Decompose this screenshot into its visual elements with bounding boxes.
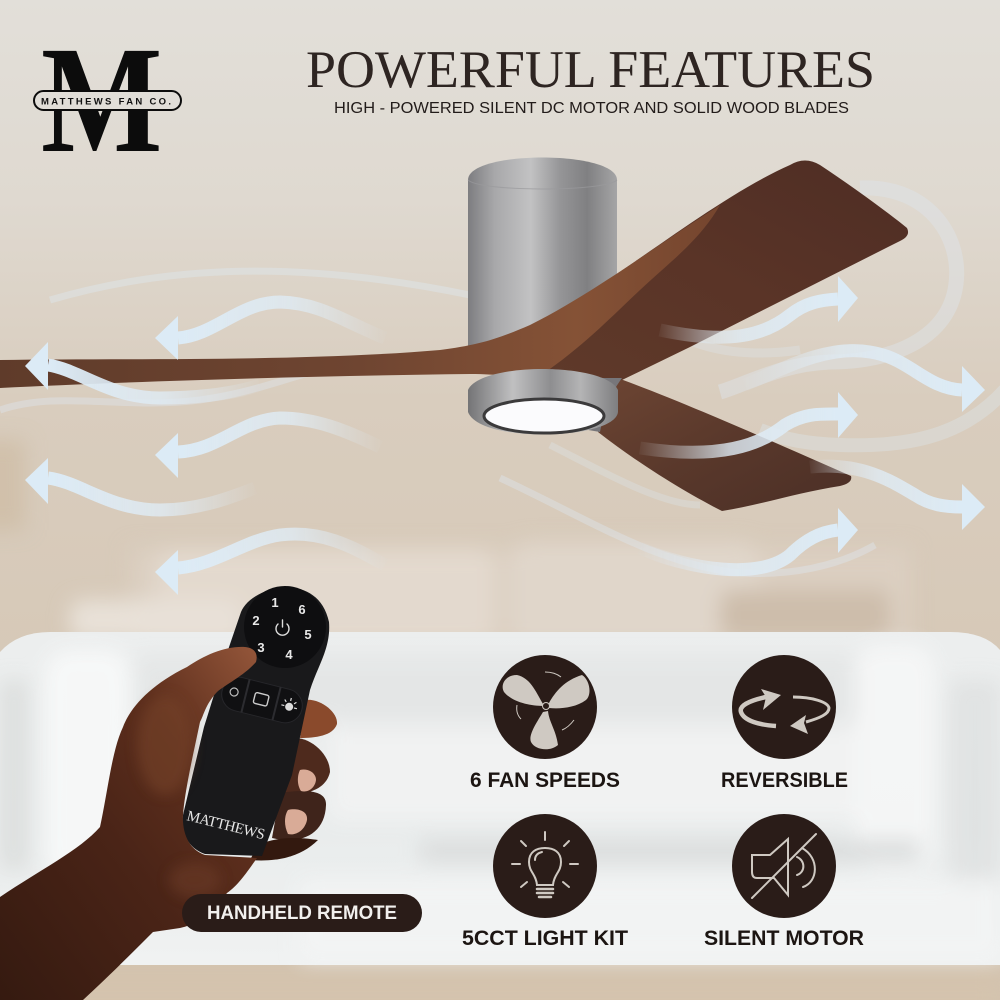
arrow top right [660,276,858,337]
logo: Matthews Fan Co.: M [41,15,162,185]
feature: 6 fan speeds [470,655,620,792]
arrow far right lower [810,466,985,530]
arrow bottom left [155,534,385,595]
airflow arrows pointing right [640,276,985,570]
feature: 5CCT light kit [462,814,628,950]
remote body [182,586,329,856]
feature: reversible [721,655,848,792]
logo: Matthews Fan Co.: MATTHEWS FAN CO. [41,96,171,108]
feature: 6 fan speeds: 6 FAN SPEEDS [470,769,620,792]
feature: silent motor [704,814,864,950]
icon: rotation arrows [732,655,836,759]
arrow far right upper [745,351,985,412]
feature: reversible: REVERSIBLE [721,769,848,792]
arrow middle right [640,392,858,452]
power icon [276,620,289,635]
fan canopy cylinder [468,158,617,360]
title: POWERFUL FEATURES [306,41,875,99]
remote body: 5 [304,627,312,642]
arrow bottom right [640,508,858,570]
speed dial [244,586,326,668]
ceiling fan [0,158,908,511]
metal mount wedge [470,378,622,432]
fingers behind remote [250,700,337,860]
remote body: 1 [271,595,279,610]
subtitle: HIGH - POWERED SILENT DC MOTOR AND SOLID WOOD BLADES [334,100,849,117]
light ring housing [468,369,618,435]
icon: fan [493,655,597,759]
arrow top left [155,302,385,360]
remote body: 4 [285,647,293,662]
thumb, palm and arm [0,647,257,1000]
faint air swirls behind fan [0,188,1000,573]
icon: light bulb [493,814,597,918]
remote brand text: MATTHEWS [185,808,267,843]
remote label pill: HANDHELD REMOTE [207,903,397,924]
arrow far left lower [25,458,255,510]
feature: 5CCT light kit: 5CCT LIGHT KIT [462,927,628,950]
remote body: 6 [298,602,306,617]
arrow far left upper [25,342,260,398]
remote body: 3 [257,640,265,655]
arrow middle left [155,418,380,478]
remote label pill [182,894,422,932]
left blade [0,205,720,388]
LED light [484,399,604,433]
feature: silent motor: SILENT MOTOR [704,927,864,950]
function buttons [218,674,306,726]
icon: muted speaker [732,814,836,918]
upper right blade [500,160,908,380]
lower right blade [598,376,851,511]
remote body: 2 [252,613,260,628]
panel: features backdrop [0,632,1000,965]
airflow arrows pointing left [25,302,385,595]
hand holding remote [0,586,337,1000]
